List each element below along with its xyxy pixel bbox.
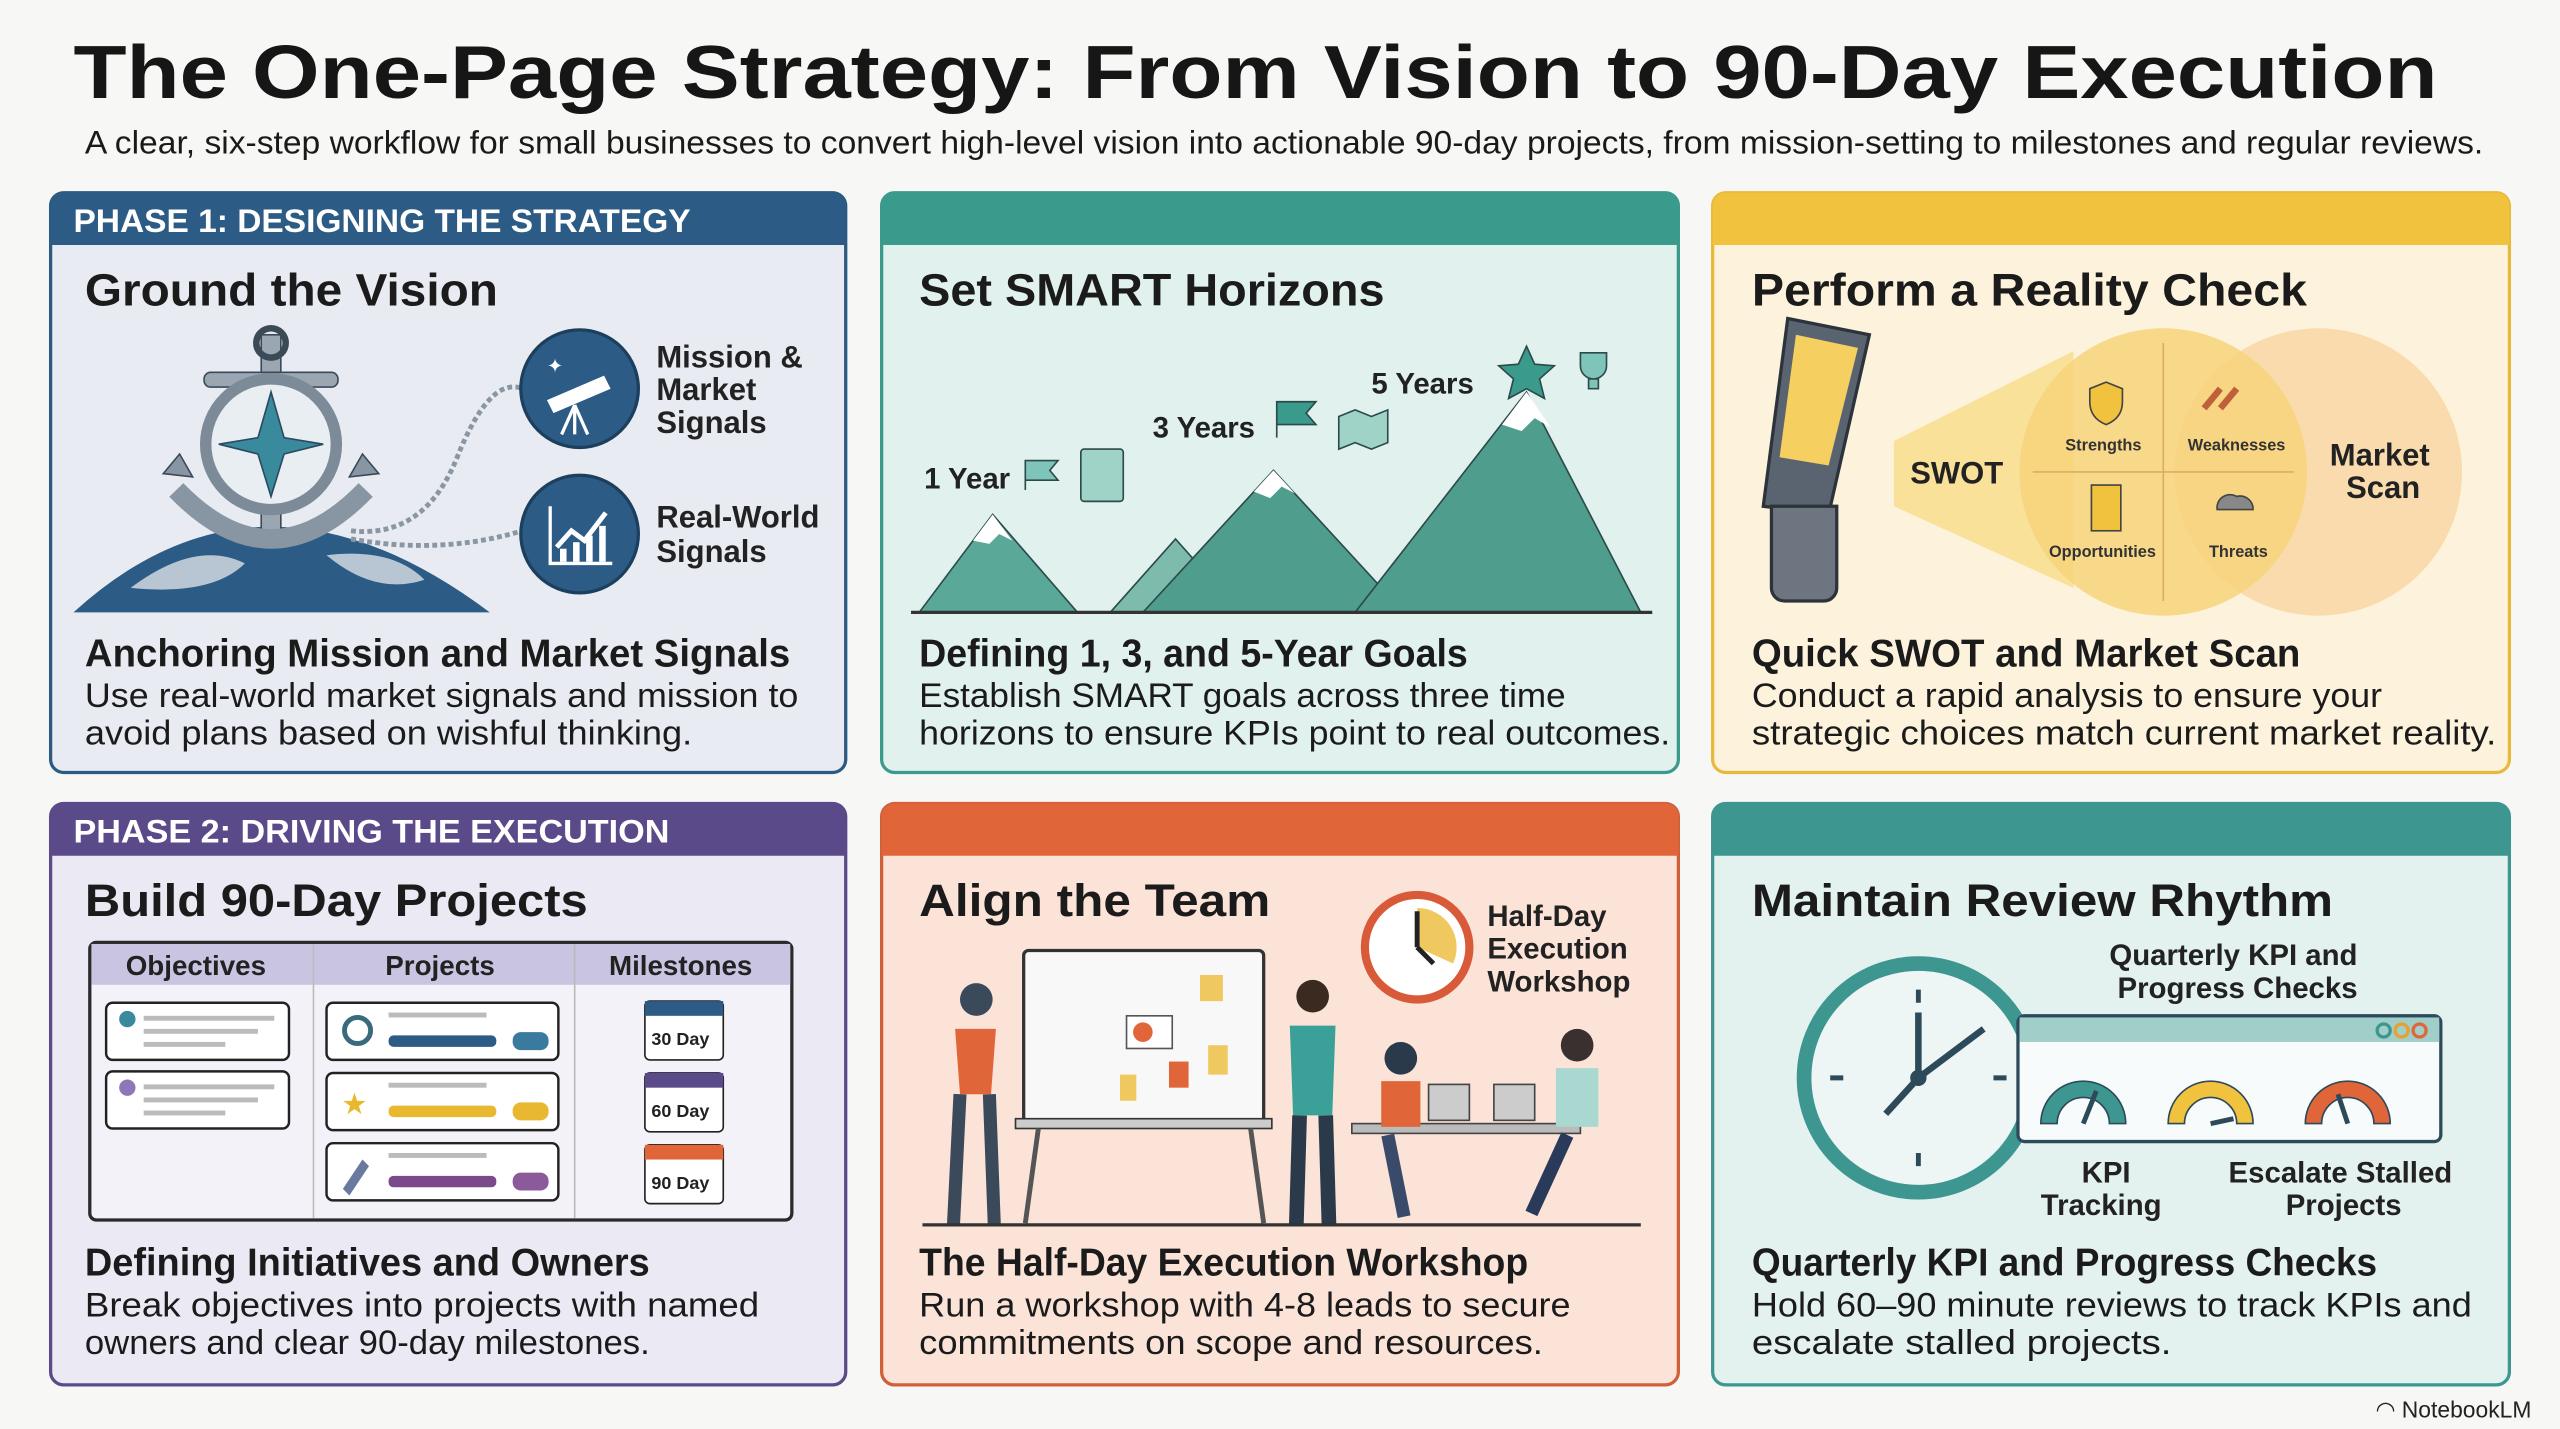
venn diagram with scanner: SWOT — [1910, 455, 2003, 490]
body text — [1752, 1286, 2472, 1362]
body text: Run a workshop with 4-8 leads to secure — [919, 1286, 1571, 1324]
icon: telescope — [521, 330, 638, 447]
illustration: team workshop — [922, 950, 1641, 1225]
label: half-day execution workshop: Execution — [1487, 933, 1628, 966]
icon: large clock — [1804, 964, 2033, 1192]
table: objectives projects milestones: 90 Day — [651, 1173, 709, 1193]
phase 1 label: PHASE 1: DESIGNING THE STRATEGY — [73, 202, 691, 239]
phase 2 label: PHASE 2: DRIVING THE EXECUTION — [73, 813, 669, 850]
venn diagram with scanner — [1763, 318, 2462, 616]
mountains chart — [911, 346, 1652, 612]
label: quarterly checks: Quarterly KPI and — [2109, 939, 2357, 972]
label: mission & market signals: Signals — [656, 405, 767, 440]
body text — [919, 677, 1670, 753]
label: quarterly checks — [2109, 939, 2358, 1005]
heading: Maintain Review Rhythm — [1752, 875, 2333, 926]
body text: Conduct a rapid analysis to ensure your — [1752, 677, 2382, 715]
table: objectives projects milestones: ★ — [341, 1088, 368, 1121]
table: objectives projects milestones: Milestones — [609, 950, 752, 981]
title: The One-Page Strategy: From Vision to 90-Day Execution — [73, 30, 2438, 114]
mountains chart: 1 Year — [924, 462, 1010, 495]
heading: Build 90-Day Projects — [85, 875, 588, 926]
body text: commitments on scope and resources. — [919, 1324, 1543, 1362]
label: mission & market signals — [656, 339, 803, 440]
body text — [85, 677, 798, 753]
body text — [1752, 677, 2496, 753]
heading: Ground the Vision — [85, 264, 498, 315]
panel: set SMART horizons — [882, 193, 1678, 772]
body text: avoid plans based on wishful thinking. — [85, 715, 692, 753]
venn diagram with scanner: Market — [2330, 437, 2430, 472]
panel: build 90-day projects — [51, 804, 846, 1385]
mountains chart: 5 Years — [1371, 368, 1474, 401]
subheading: Defining 1, 3, and 5-Year Goals — [919, 632, 1468, 675]
venn diagram with scanner: Strengths — [2065, 437, 2141, 455]
body text: horizons to ensure KPIs point to real outcomes. — [919, 715, 1670, 753]
illustration: anchor on globe — [73, 328, 522, 612]
mountains chart: 3 Years — [1153, 412, 1255, 445]
icon: clock — [1365, 895, 1469, 999]
label: real-world signals: Real-World — [656, 500, 819, 535]
subheading: Quarterly KPI and Progress Checks — [1752, 1241, 2377, 1284]
panel: maintain review rhythm — [1713, 804, 2509, 1385]
body text — [919, 1286, 1571, 1362]
table: objectives projects milestones: Objectives — [126, 950, 266, 981]
table: objectives projects milestones: Projects — [385, 950, 495, 981]
panel: reality check — [1713, 193, 2509, 772]
label: escalate stalled projects: Projects — [2286, 1189, 2402, 1222]
label: kpi tracking: KPI — [2082, 1156, 2131, 1189]
body text: owners and clear 90-day milestones. — [85, 1324, 650, 1362]
body text: strategic choices match current market reality. — [1752, 715, 2496, 753]
label: escalate stalled projects — [2229, 1156, 2452, 1222]
label: real-world signals: Signals — [656, 534, 767, 569]
icon: chart — [521, 475, 638, 593]
table: objectives projects milestones: 30 Day — [651, 1029, 709, 1049]
venn diagram with scanner: Weaknesses — [2188, 437, 2285, 455]
venn diagram with scanner: Scan — [2346, 470, 2420, 505]
label: kpi tracking: Tracking — [2041, 1189, 2162, 1222]
label: mission & market signals: Mission & — [656, 339, 803, 374]
label: half-day execution workshop — [1487, 900, 1630, 998]
body text: Break objectives into projects with named — [85, 1286, 759, 1324]
label: escalate stalled projects: Escalate Stalled — [2229, 1156, 2452, 1189]
label: quarterly checks: Progress Checks — [2118, 972, 2358, 1005]
label: half-day execution workshop: Workshop — [1487, 965, 1630, 998]
label: real-world signals — [656, 500, 819, 569]
subheading: Defining Initiatives and Owners — [85, 1241, 650, 1284]
body text: Hold 60–90 minute reviews to track KPIs and — [1752, 1286, 2472, 1324]
label: half-day execution workshop: Half-Day — [1487, 900, 1607, 933]
subheading: Quick SWOT and Market Scan — [1752, 632, 2300, 675]
heading: Perform a Reality Check — [1752, 264, 2308, 315]
label: kpi tracking — [2041, 1156, 2162, 1222]
body text: escalate stalled projects. — [1752, 1324, 2171, 1362]
icon: telescope: ✦ — [547, 355, 563, 377]
label: mission & market signals: Market — [656, 372, 756, 407]
body text: Use real-world market signals and mission to — [85, 677, 798, 715]
subtitle: A clear, six-step workflow for small businesses to convert high-level vision into actionable 90-day projects, from mission-setting to milestones and regular reviews. — [85, 124, 2483, 161]
footer: NotebookLM logo: ◠ NotebookLM — [2376, 1397, 2531, 1423]
body text: Establish SMART goals across three time — [919, 677, 1566, 715]
table: objectives projects milestones — [90, 942, 792, 1220]
venn diagram with scanner: Threats — [2209, 543, 2268, 561]
table: objectives projects milestones: 60 Day — [651, 1101, 709, 1121]
panel: align the team — [882, 804, 1678, 1385]
panel: ground the vision — [51, 193, 846, 772]
body text — [85, 1286, 759, 1362]
dashboard gauges — [2018, 1016, 2441, 1142]
subheading: The Half-Day Execution Workshop — [919, 1241, 1528, 1284]
venn diagram with scanner: Opportunities — [2049, 543, 2156, 561]
subheading: Anchoring Mission and Market Signals — [85, 632, 790, 675]
heading: Set SMART Horizons — [919, 264, 1384, 315]
heading: Align the Team — [919, 875, 1270, 926]
